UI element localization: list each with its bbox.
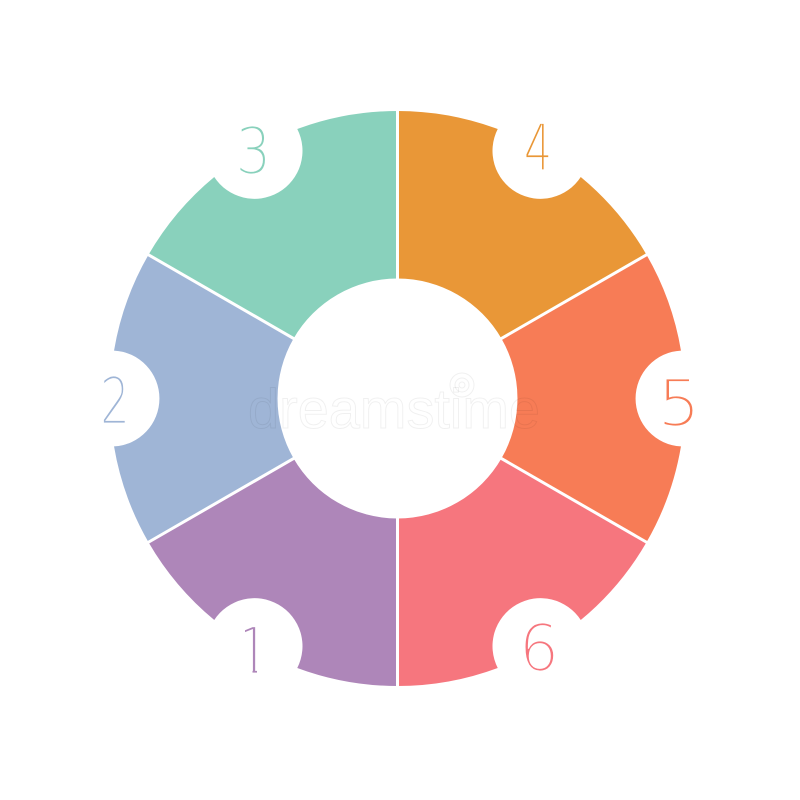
number 1: 1 bbox=[233, 615, 273, 688]
watermark: dreamstime bbox=[248, 377, 540, 440]
segment 3: mint bbox=[148, 111, 398, 338]
segment 4: orange bbox=[398, 111, 646, 338]
segment 2: blue bbox=[114, 255, 294, 542]
number 4: 4 bbox=[524, 112, 552, 185]
number 3: 3 bbox=[236, 115, 271, 188]
segment 6: pink-red bbox=[398, 458, 646, 686]
number 2: 2 bbox=[100, 366, 130, 439]
infographic: six-segment ring diagram bbox=[104, 111, 692, 686]
segment 1: purple bbox=[148, 458, 398, 686]
segment 5: coral bbox=[501, 255, 681, 542]
number 6: 6 bbox=[519, 612, 559, 685]
number 5: 5 bbox=[658, 367, 700, 440]
